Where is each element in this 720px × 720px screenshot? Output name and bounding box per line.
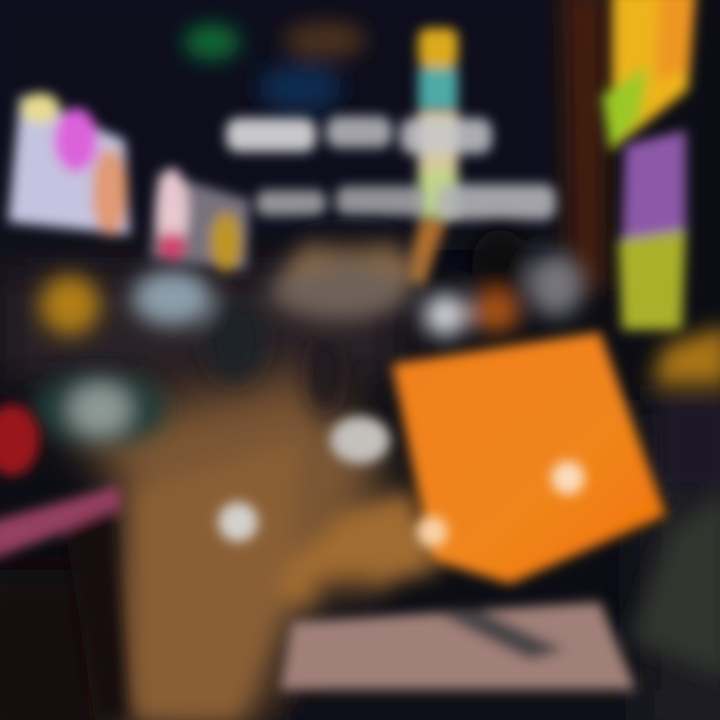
headline blur: upper line [226, 116, 492, 154]
colour column [404, 28, 458, 285]
round teal object [34, 370, 166, 446]
banner: yellow hanging top right [602, 0, 696, 152]
right side dark area with orange ledge [630, 325, 720, 680]
ceiling lights [184, 22, 367, 112]
paper sheet with dark marks [280, 602, 636, 690]
wooden table surfaces [135, 440, 440, 720]
pillar: dark red [562, 0, 606, 290]
screen: left wall display [8, 93, 130, 236]
screen: second wall display [150, 168, 250, 272]
orange laptop [392, 332, 666, 584]
people and mid-room objects [40, 226, 584, 413]
headline blur: lower line [256, 184, 556, 220]
white highlights [218, 416, 585, 548]
banner: purple and lime lower right [618, 130, 686, 330]
red seat and pink table at left [0, 404, 130, 720]
